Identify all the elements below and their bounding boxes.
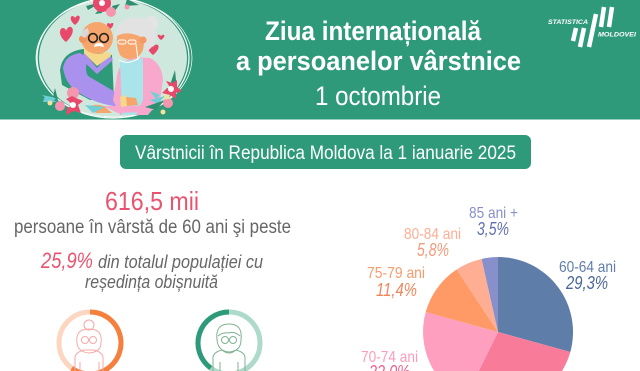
key figure: total elderly	[14, 186, 291, 238]
label: 85 ani +	[469, 205, 518, 239]
logo: Statistica Moldovei: MOLDOVEI	[598, 32, 636, 38]
label: 80-84 ani: 5,8%	[417, 240, 449, 260]
man	[60, 22, 122, 107]
title: Ziua internațională	[265, 16, 482, 46]
woman	[113, 16, 163, 115]
key figure: share of population: reședința obișnuită	[85, 272, 218, 292]
label: 75-79 ani: 75-79 ani	[367, 265, 425, 282]
key figure: total elderly: persoane în vârstă de 60 ani şi peste	[14, 217, 291, 238]
label: 70-74 ani	[361, 349, 418, 371]
title: 1 octombrie	[315, 81, 441, 111]
logo: Statistica Moldovei: STATISTICA	[548, 19, 588, 26]
label: 85 ani +: 85 ani +	[469, 205, 518, 222]
subtitle banner	[120, 135, 531, 169]
logo: Statistica Moldovei	[548, 7, 636, 47]
title	[236, 16, 521, 111]
hands	[88, 95, 146, 113]
illustration: elderly couple	[36, 0, 192, 118]
label: 75-79 ani	[367, 265, 425, 300]
key figure: share of population	[40, 248, 263, 292]
key figure: share of population: 25,9%	[40, 248, 93, 273]
label: 60-64 ani: 29,3%	[565, 273, 608, 293]
label: 75-79 ani: 11,4%	[376, 280, 417, 300]
header band	[0, 0, 640, 120]
hearts	[60, 16, 164, 55]
label: 80-84 ani: 80-84 ani	[404, 226, 461, 243]
label: 60-64 ani: 60-64 ani	[559, 259, 616, 276]
pie chart: age groups	[423, 257, 573, 371]
label: 80-84 ani	[404, 226, 461, 260]
flowers	[42, 0, 182, 115]
label: 85 ani +: 3,5%	[477, 219, 509, 239]
label: 70-74 ani: 70-74 ani	[361, 349, 418, 366]
key figure: share of population: din totalul populației cu	[98, 252, 263, 272]
key figure: total elderly: 616,5 mii	[105, 186, 199, 216]
label: 60-64 ani	[559, 259, 616, 293]
icon: elderly woman ring	[59, 312, 121, 371]
title: a persoanelor vârstnice	[236, 46, 521, 76]
icon: elderly man ring	[198, 312, 260, 371]
subtitle banner: Vârstnicii în Republica Moldova la 1 ianuarie 2025	[135, 143, 516, 164]
